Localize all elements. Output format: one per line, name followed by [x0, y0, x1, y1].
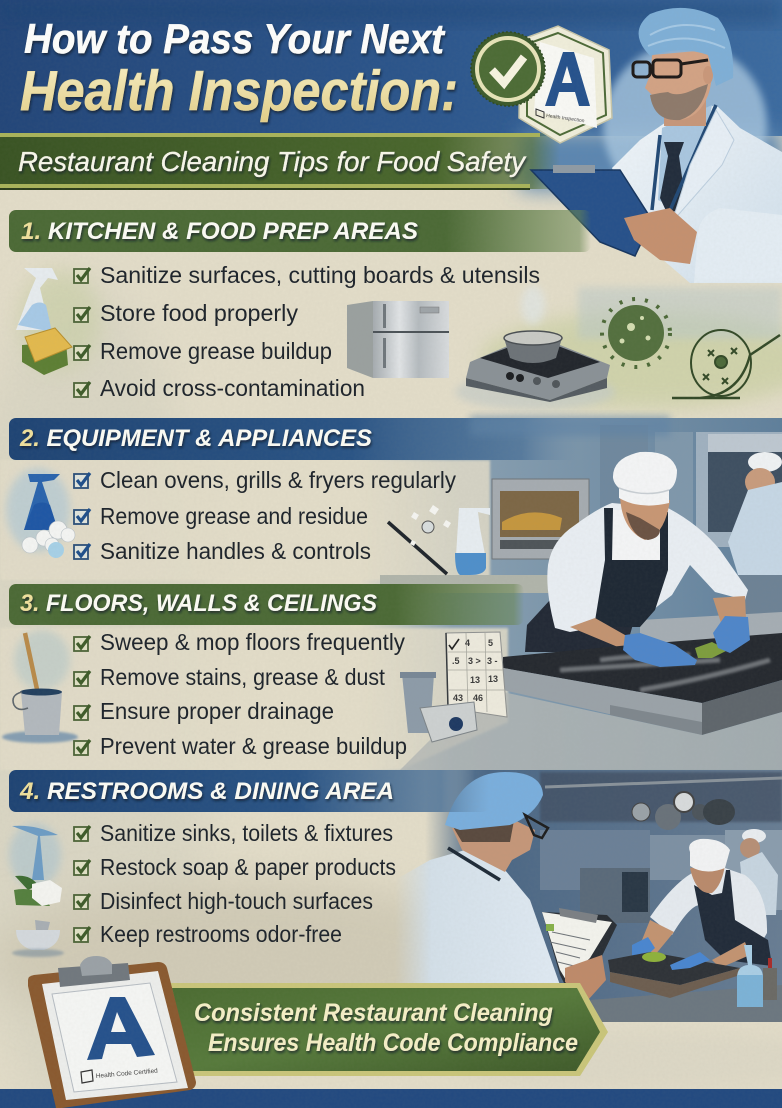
section 2 banner: 2. EQUIPMENT & APPLIANCES [19, 425, 373, 452]
section 1 banner: 1. KITCHEN & FOOD PREP AREAS [21, 218, 419, 245]
coat [395, 850, 560, 985]
steel wall behind counter [640, 612, 782, 650]
ear [703, 66, 713, 84]
hanging pans [545, 778, 782, 830]
hand [624, 208, 697, 264]
chef hat [613, 452, 677, 506]
icon: cleaning schedule calendar: 3 > [468, 656, 481, 666]
icon: cleaning schedule calendar: .5 [452, 656, 460, 666]
section 3 banner [9, 584, 524, 625]
lanyard [448, 848, 500, 880]
section 2 checklist: Sanitize handles & controls [100, 538, 371, 564]
inspector figure [531, 8, 782, 283]
icon: blue bottle with bubbles [6, 468, 75, 558]
icon: trash bin and box [400, 672, 477, 742]
glasses [525, 815, 548, 838]
icon: germ [602, 299, 670, 367]
section 3 checklist: Prevent water & grease buildup [100, 733, 407, 759]
scene upper dark ceiling [540, 772, 782, 822]
clip [58, 963, 130, 987]
sleeve [694, 208, 782, 283]
hand [565, 955, 606, 1000]
icon: cleaning schedule calendar: 13 [470, 675, 480, 685]
neck [452, 818, 535, 872]
gloves [632, 937, 655, 962]
section 4 checklist: Sanitize sinks, toilets & fixtures [100, 820, 393, 846]
lapel [672, 110, 734, 222]
icon: cleaning schedule calendar: 13 [488, 674, 498, 684]
title: How to Pass Your Next [24, 15, 446, 62]
icon: stove with pot [455, 285, 615, 410]
apron [694, 870, 772, 966]
header background [0, 0, 782, 207]
background kitchen oven [600, 425, 782, 555]
floor [400, 692, 782, 770]
section 4 banner: 4. RESTROOMS & DINING AREA [19, 778, 394, 805]
icon: cleaning schedule calendar: 4 [465, 638, 470, 648]
section 2 checklist: Remove grease and residue [100, 503, 368, 529]
section 1 checklist [74, 262, 540, 401]
section 4 checklist: Restock soap & paper products [100, 854, 396, 880]
section 4 checklist: Keep restrooms odor-free [100, 921, 342, 947]
glasses [633, 60, 708, 77]
section 1 checklist: Store food properly [100, 300, 298, 326]
section 4 scene [425, 770, 782, 1022]
background tone washes [0, 280, 782, 1108]
granite counter [400, 633, 782, 770]
section 3 checklist: Sweep & mop floors frequently [100, 629, 405, 655]
shirt [612, 510, 662, 560]
neck and face [620, 497, 670, 540]
lower steel table [590, 985, 782, 1022]
jacket [650, 868, 767, 945]
footer banner [170, 983, 608, 1076]
background chef [740, 829, 778, 915]
trousers [525, 600, 640, 652]
forearms [570, 618, 625, 650]
section 3 checklist: Ensure proper drainage [100, 698, 334, 724]
icon: scraper tool [388, 505, 451, 574]
icon: stainless refrigerator [347, 301, 449, 378]
arms [640, 920, 674, 955]
beard [626, 512, 660, 540]
background chef [728, 452, 782, 620]
icon: spray bottle and sponge [16, 268, 72, 375]
icon: grade A shield badge [519, 26, 612, 143]
section 2 checklist: Clean ovens, grills & fryers regularly [100, 467, 456, 493]
counter ledge [380, 575, 560, 593]
gloves and sponge [623, 616, 750, 667]
granite counter [608, 952, 740, 985]
soap bottle and jar [737, 945, 777, 1007]
section 1 illustration wash [20, 270, 782, 408]
scene: kitchen with chef background [0, 418, 782, 770]
icon: mop and bucket [2, 630, 78, 743]
face [645, 50, 712, 120]
hair [452, 815, 515, 842]
clipboard [542, 912, 617, 985]
grade A clipboard [28, 956, 196, 1108]
title [20, 15, 458, 123]
hairnet [639, 8, 733, 86]
icon: cleaning schedule calendar: 3 - [487, 656, 498, 666]
lanyard [652, 105, 716, 215]
apron [594, 508, 668, 627]
section 2 checklist [74, 467, 456, 564]
clipboard [531, 170, 652, 256]
section 4 checklist [74, 820, 396, 947]
tie [660, 142, 686, 215]
checkbox label [81, 1070, 93, 1083]
icon: cleaning schedule calendar: 5 [488, 638, 493, 648]
icon: spray bottle [455, 508, 490, 575]
jacket [547, 503, 748, 632]
grade A clipboard: Health Code Certified [96, 1068, 158, 1080]
left soft cream panel over scene [0, 460, 508, 770]
icon: cleaning schedule calendar: 46 [473, 693, 483, 703]
steel cabinets and ovens [540, 830, 782, 923]
title: Health Inspection: [20, 59, 458, 123]
footer banner: Ensures Health Code Compliance [208, 1029, 578, 1057]
section 4 checklist: Disinfect high-touch surfaces [100, 888, 373, 914]
section 3 checklist: Remove stains, grease & dust [100, 664, 386, 690]
section 1 checklist: Sanitize surfaces, cutting boards & utensils [100, 262, 540, 288]
section 2 banner [9, 416, 670, 460]
footer banner: Consistent Restaurant Cleaning [194, 999, 553, 1027]
coat [612, 105, 782, 283]
icon: green check seal [471, 32, 545, 106]
section 3 banner: 3. FLOORS, WALLS & CEILINGS [20, 590, 378, 617]
icon: cleaning schedule calendar: 43 [453, 693, 463, 703]
beard [650, 84, 708, 120]
icon: oven [492, 479, 589, 559]
inspector seen from behind [395, 772, 617, 1000]
icon: cleaning schedule calendar [446, 632, 507, 717]
chef cleaning counter [525, 452, 748, 652]
letter A [87, 997, 155, 1060]
blue shirt [658, 105, 712, 205]
icon: bacteria sketch [672, 330, 780, 398]
footer blue strip [0, 1089, 782, 1108]
section 1 banner [9, 210, 591, 252]
foreground chef with hat [608, 839, 772, 998]
icon: faucet, soap and sink [9, 823, 64, 957]
hairnet [445, 772, 543, 830]
section 4 banner [9, 770, 489, 812]
icon: grade A shield badge: Health Inspection [546, 113, 585, 124]
section 1 checklist: Avoid cross-contamination [100, 375, 365, 401]
subtitle band: Restaurant Cleaning Tips for Food Safety [18, 146, 527, 177]
face [690, 865, 725, 893]
section 3 checklist [74, 629, 407, 759]
subtitle band [0, 133, 560, 190]
neck [664, 100, 706, 126]
section 1 checklist: Remove grease buildup [100, 338, 332, 364]
hat [689, 839, 730, 872]
